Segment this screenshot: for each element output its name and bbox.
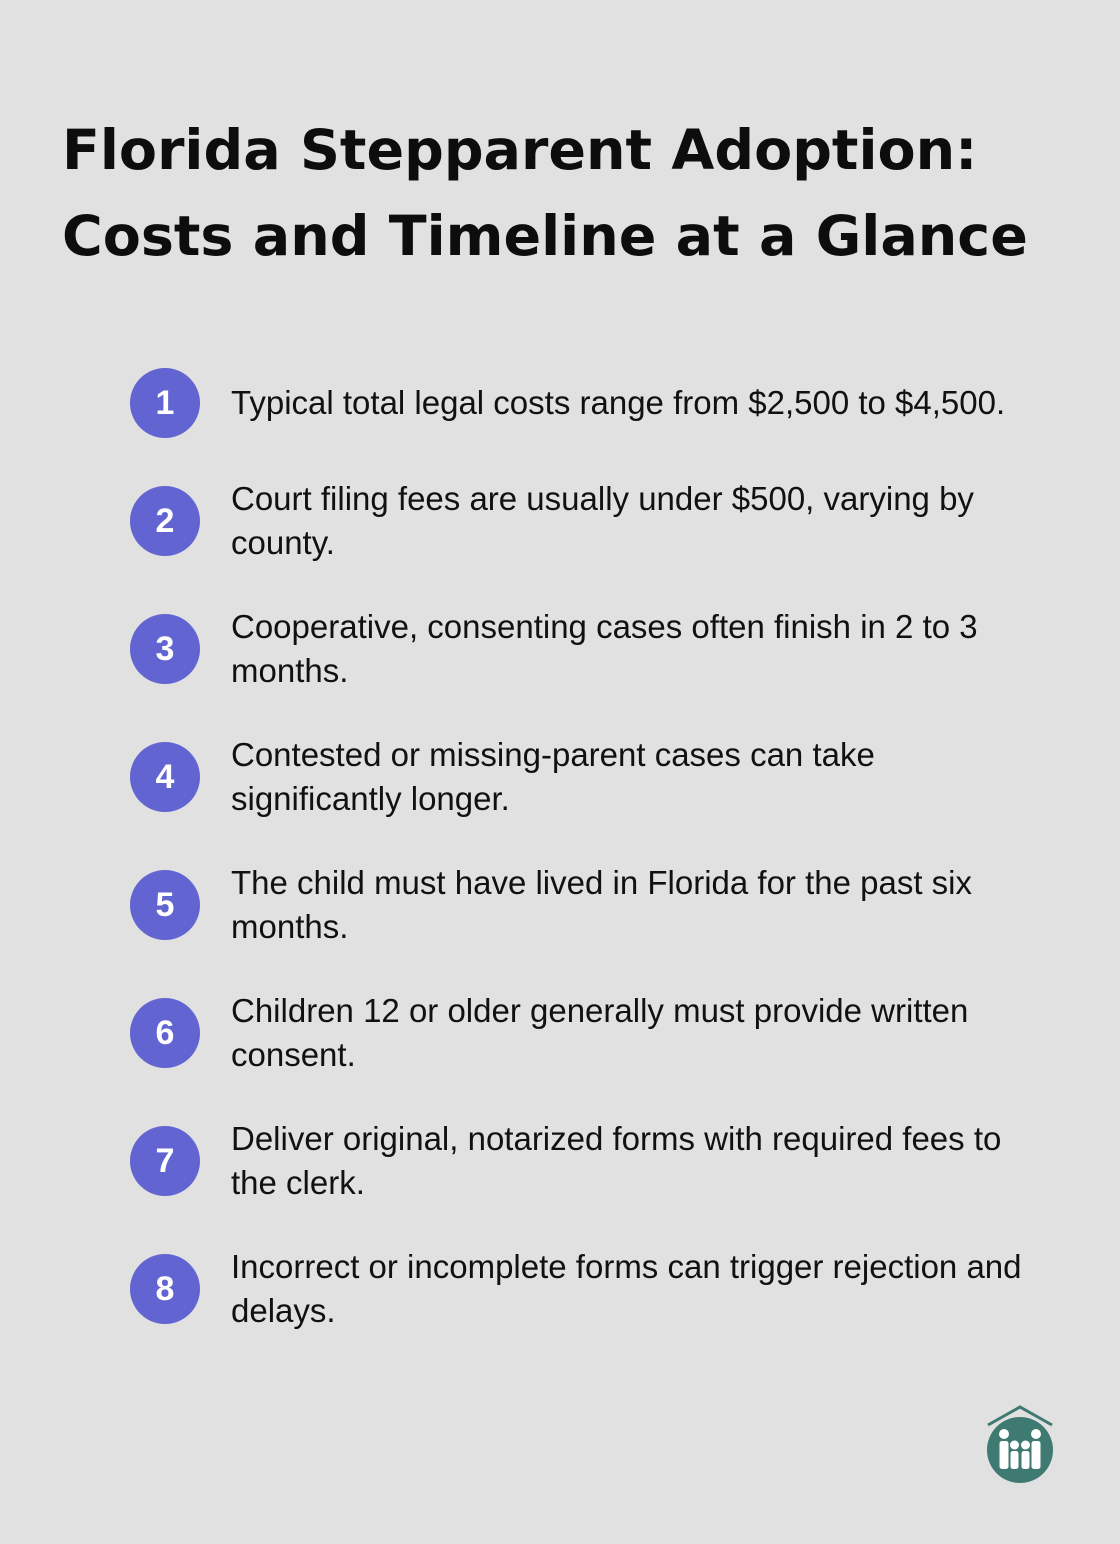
item 8: Incorrect or incomplete forms can trigger rejection and	[231, 1248, 1022, 1285]
item 3: months.	[231, 652, 348, 689]
item 6: consent.	[231, 1036, 356, 1073]
item 7: the clerk.	[231, 1164, 365, 1201]
item 5: The child must have lived in Florida for the past six	[231, 864, 972, 901]
item 7: Deliver original, notarized forms with required fees to	[231, 1120, 1001, 1157]
item 8: delays.	[231, 1292, 336, 1329]
item 2: 2	[156, 502, 174, 540]
item 4: Contested or missing-parent cases can take	[231, 736, 875, 773]
item 4: significantly longer.	[231, 780, 510, 817]
item 2: county.	[231, 524, 335, 561]
item 6: Children 12 or older generally must provide written	[231, 992, 968, 1029]
item 2	[130, 480, 974, 561]
item 7	[130, 1120, 1001, 1201]
item 7: 7	[156, 1142, 174, 1180]
item 5: months.	[231, 908, 348, 945]
icon: logo	[987, 1405, 1053, 1483]
item 1: Typical total legal costs range from $2,500 to $4,500.	[231, 384, 1005, 421]
item 3: 3	[156, 630, 174, 668]
title	[62, 118, 1028, 269]
item 4: 4	[156, 758, 174, 796]
item 3	[130, 608, 978, 689]
item 8	[130, 1248, 1022, 1329]
item 6: 6	[156, 1014, 174, 1052]
item 2: Court filing fees are usually under $500, varying by	[231, 480, 974, 517]
item 5	[130, 864, 972, 945]
item 5: 5	[156, 886, 174, 924]
item 4	[130, 736, 875, 817]
title: Florida Stepparent Adoption:	[62, 118, 977, 183]
title: Costs and Timeline at a Glance	[62, 204, 1028, 269]
item 8: 8	[156, 1270, 174, 1308]
item 6	[130, 992, 968, 1073]
item 1	[130, 368, 1005, 438]
item 1: 1	[156, 384, 174, 422]
item 3: Cooperative, consenting cases often finish in 2 to 3	[231, 608, 978, 645]
